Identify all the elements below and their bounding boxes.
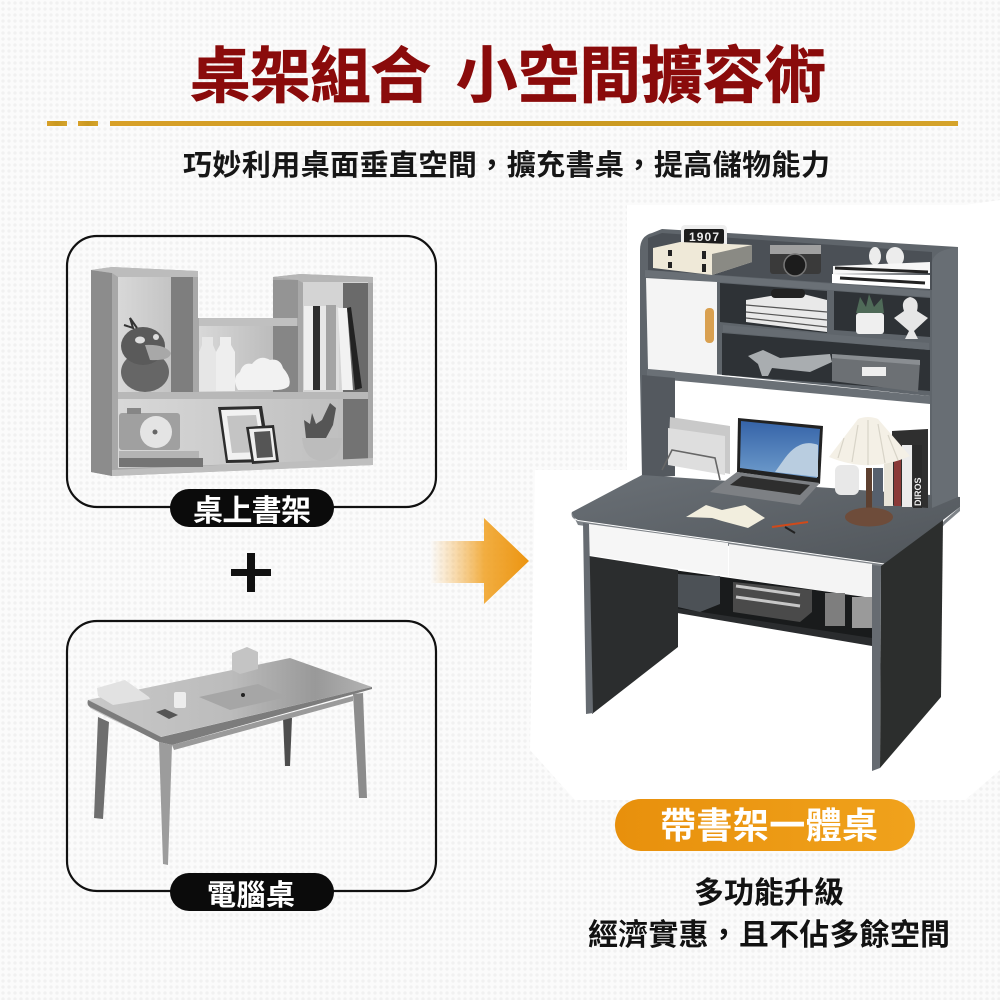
white cutout behind desk [530, 200, 1000, 800]
books behind lamp: DIROS [913, 477, 923, 506]
headphones [869, 247, 904, 267]
plus sign [231, 553, 271, 592]
integrated desk with hutch [572, 225, 960, 771]
icon: photo frames [218, 406, 279, 464]
desktop [572, 475, 960, 568]
icon: stacked books [119, 451, 203, 467]
hutch right side panel [932, 247, 958, 508]
result description [588, 877, 950, 952]
arrow [430, 518, 529, 604]
table illustration [88, 647, 372, 865]
result pill: 帶書架一體桌 [660, 805, 878, 846]
subtitle: 巧妙利用桌面垂直空間，擴充書桌，提高儲物能力 [183, 149, 830, 182]
title [190, 42, 826, 111]
plaster bust [894, 297, 928, 339]
drawers [589, 524, 872, 598]
shelf label [170, 489, 334, 528]
icon: cup [174, 692, 186, 708]
potted succulent [856, 294, 884, 334]
model plane [748, 350, 832, 376]
title: 桌架組合 [190, 42, 431, 110]
cabinet door [646, 278, 717, 375]
icon: books [97, 680, 150, 705]
desk label: 電腦桌 [207, 879, 295, 912]
result description: 多功能升級 [694, 877, 844, 910]
right leg [872, 520, 943, 771]
clock [681, 225, 727, 248]
storage box [832, 354, 920, 392]
under-desk shelf [642, 567, 872, 646]
icon: toy camera [119, 408, 180, 450]
stacked magazines [746, 289, 827, 332]
mug [835, 465, 859, 495]
file rack [662, 417, 730, 480]
shelf label: 桌上書架 [193, 495, 311, 528]
desk label [170, 873, 334, 912]
clock: 1907 [689, 230, 719, 244]
books behind lamp [873, 429, 928, 508]
icon: bottles [199, 337, 235, 391]
icon: books [304, 305, 362, 390]
title: 小空間擴容術 [456, 42, 826, 111]
icon: potted plant [302, 403, 342, 461]
icon: phone [156, 709, 178, 719]
pencil [772, 522, 808, 533]
title rule [47, 121, 958, 126]
result description: 經濟實惠，且不佔多餘空間 [588, 919, 950, 952]
binders [653, 242, 752, 275]
icon: tissue box [232, 647, 258, 674]
panel: desktop shelf [67, 236, 436, 528]
left leg [583, 523, 678, 714]
icon: duck toy [121, 318, 171, 392]
hutch [640, 225, 958, 508]
shelf illustration [91, 267, 373, 476]
table lamp [829, 417, 910, 526]
open notebook [686, 505, 765, 528]
icon: cloud lamp [235, 358, 290, 390]
result pill [615, 799, 915, 851]
magazines [832, 262, 930, 289]
panel: computer desk [67, 621, 436, 912]
icon: laptop [199, 684, 287, 710]
laptop [710, 418, 823, 505]
camera [770, 245, 821, 276]
